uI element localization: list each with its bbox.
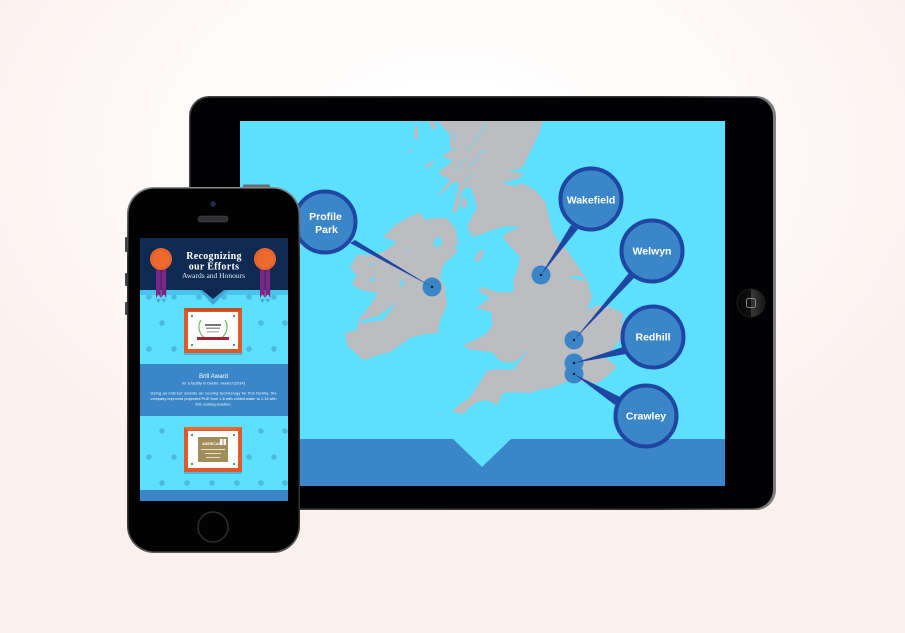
map of UK and Ireland <box>345 121 623 416</box>
bottom band <box>140 490 288 501</box>
callout: Welwyn <box>564 220 682 350</box>
scene: tablet and phone mockup <box>125 0 776 553</box>
callout: Profile Park <box>294 192 442 296</box>
panel: Brill Award text band: Using an indirect outside air cooling technology for this facility, the <box>150 392 276 396</box>
callout: Welwyn: Welwyn <box>633 246 671 258</box>
blue footer band with notch <box>240 439 725 486</box>
callout: Profile Park: Profile <box>309 211 342 223</box>
polka dot pattern <box>146 294 288 486</box>
tablet <box>189 96 776 510</box>
icon: phone speaker <box>198 216 228 222</box>
callout: Redhill: Redhill <box>635 332 671 344</box>
award plaque: Americas award <box>184 427 242 474</box>
lighter strip under header <box>140 290 288 295</box>
header band <box>140 238 288 299</box>
callout: Crawley: Crawley <box>626 410 666 422</box>
map water details <box>405 123 487 252</box>
icon: tablet home button <box>737 289 765 317</box>
icon: left rosette <box>150 248 172 303</box>
heading: Recognizing our Efforts: our Efforts <box>189 262 239 272</box>
phone side buttons <box>125 184 270 315</box>
callout: Redhill <box>564 306 684 384</box>
callout: Wakefield: Wakefield <box>567 194 615 206</box>
header pointer shadow <box>199 290 228 305</box>
phone <box>125 184 300 553</box>
tablet screen <box>240 121 725 486</box>
icon: phone home button <box>198 512 228 542</box>
heading: Recognizing our Efforts <box>182 251 245 280</box>
heading: Recognizing our Efforts: Recognizing <box>186 251 242 262</box>
panel: Brill Award text band: company improved projected PUE from 1.6 with chilled water to 1.15 with <box>150 397 276 401</box>
icon: phone camera <box>210 201 216 207</box>
panel: Brill Award text band: Brill Award <box>199 373 229 380</box>
heading: Recognizing our Efforts: Awards and Honours <box>182 271 245 280</box>
callout: Profile Park: Park <box>315 224 338 236</box>
phone screen <box>140 238 288 501</box>
icon: right rosette <box>254 248 276 303</box>
panel: Brill Award text band <box>140 364 288 416</box>
panel: Brill Award text band: for a facility in Dublin, Ireland (2014) <box>182 382 246 386</box>
callout: Wakefield <box>532 168 622 284</box>
panel: Brill Award text band: this cooling solution. <box>196 402 232 406</box>
award plaque: Americas award: AMERICAS <box>202 442 221 446</box>
award plaque: Brill Award <box>184 308 242 355</box>
callout: Crawley <box>573 373 676 446</box>
